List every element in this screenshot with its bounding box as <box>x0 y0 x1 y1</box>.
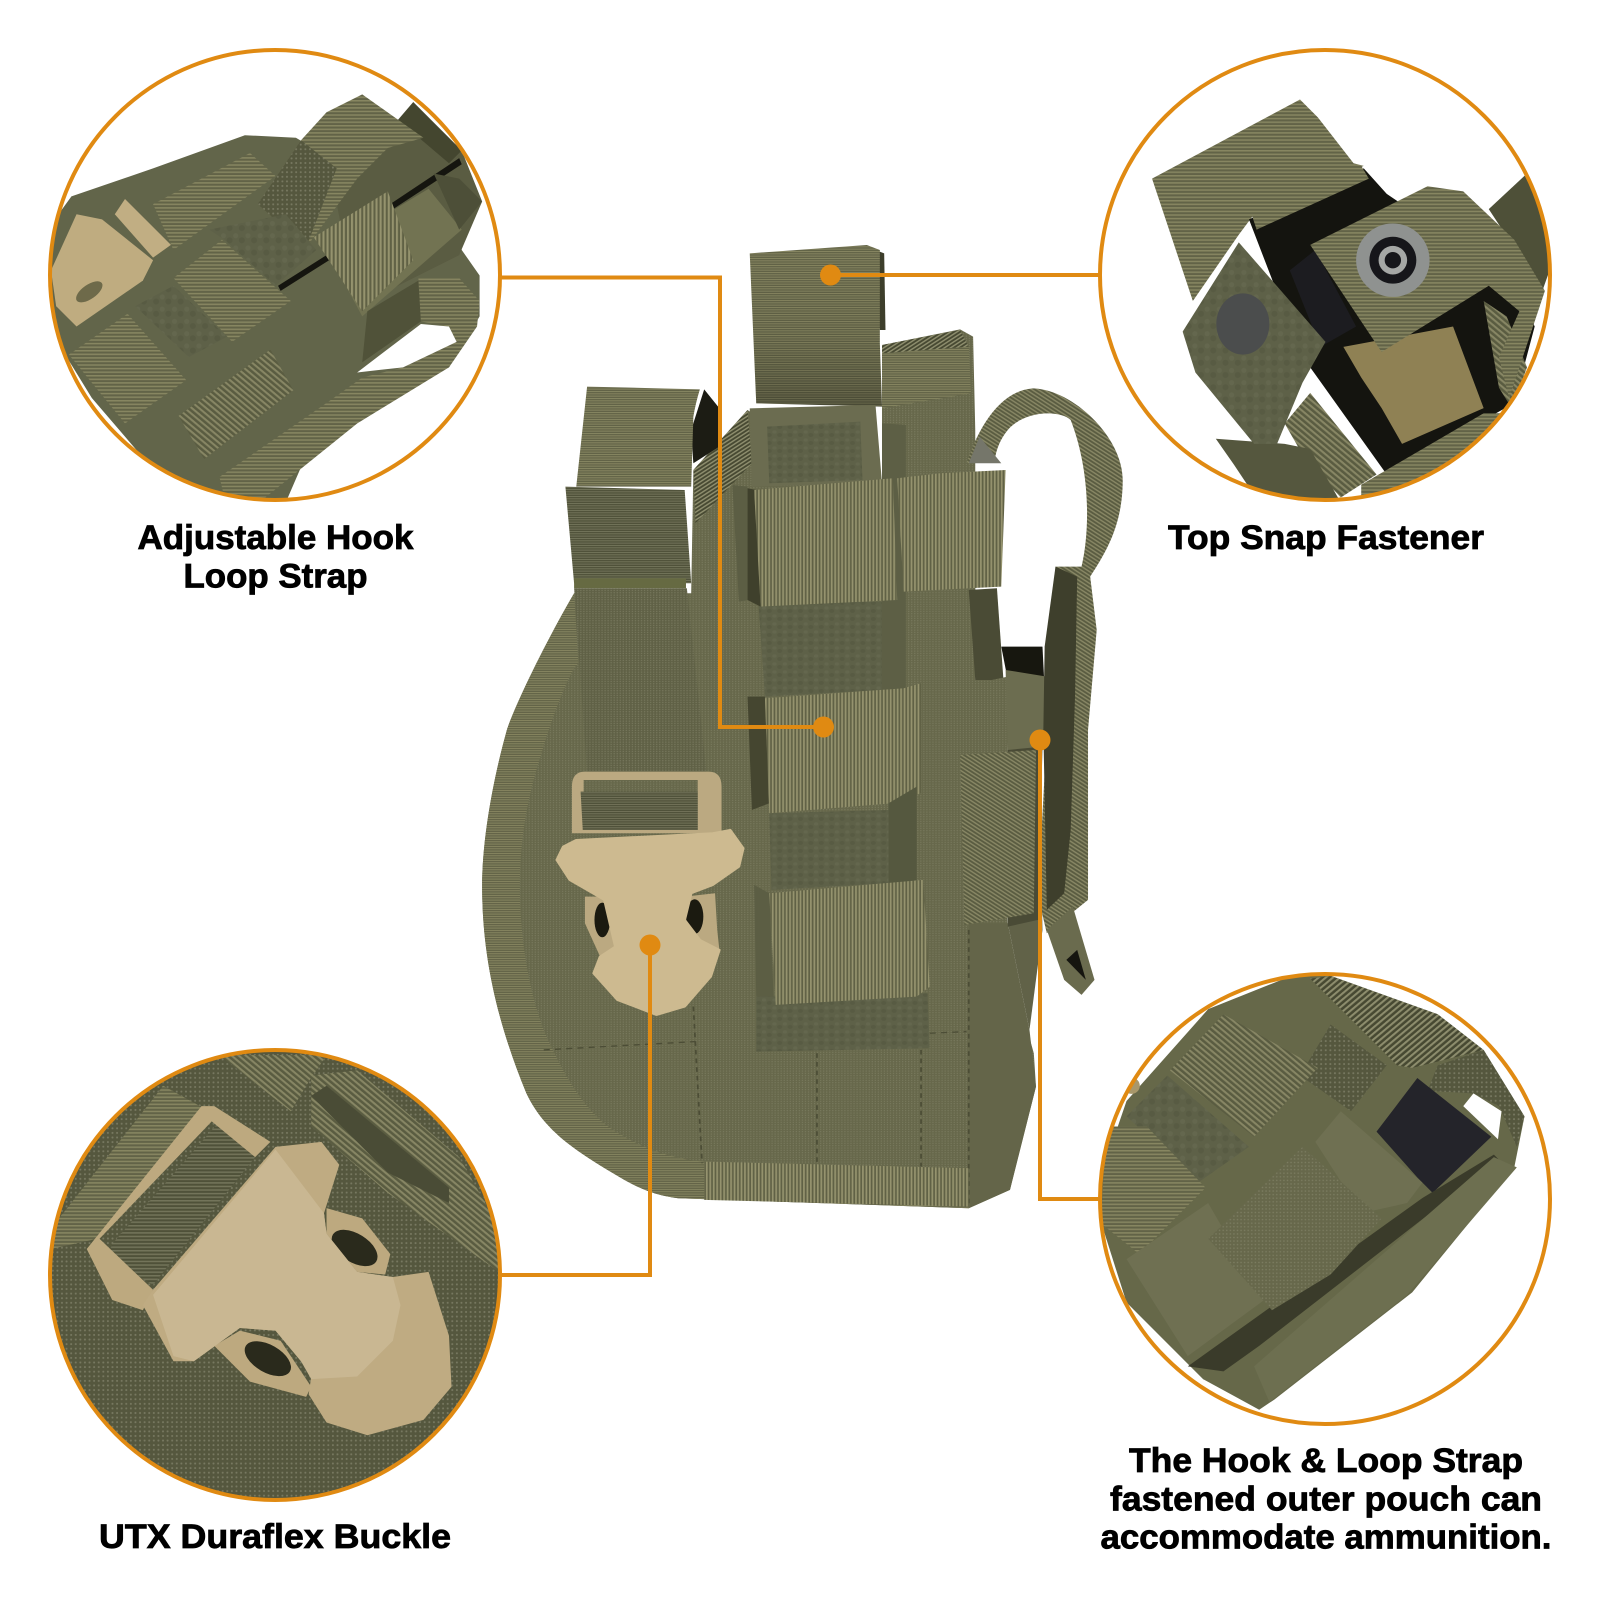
small pull loop <box>1047 907 1095 995</box>
left strap loop <box>576 387 719 487</box>
buckle <box>557 772 743 1015</box>
panel: detail circle outer pouch <box>1093 968 1550 1424</box>
buckle wing right <box>685 893 719 950</box>
buckle wings <box>585 897 617 957</box>
left strap keeper <box>565 487 691 583</box>
bottom ribbed band <box>704 1162 969 1207</box>
seams <box>544 930 969 1207</box>
ring <box>50 50 500 500</box>
label: hook and loop pouch: The Hook & Loop Strap <box>1129 1442 1523 1480</box>
connector lines <box>500 275 1100 1275</box>
marker dots <box>640 264 1050 956</box>
panel: detail circle buckle <box>46 1045 505 1504</box>
flap strap loop <box>967 388 1123 933</box>
right side panel <box>969 923 1036 1208</box>
ribbed edge binding <box>482 593 969 1208</box>
label: hook and loop pouch: accommodate ammunition. <box>1100 1518 1552 1556</box>
velcro panel middle <box>758 602 882 697</box>
main holster product <box>482 245 1123 1208</box>
ring <box>1100 50 1550 500</box>
webbing band two <box>748 683 921 813</box>
right outer pouch parts <box>960 647 1047 1030</box>
webbing band one <box>732 470 1006 607</box>
panel: detail circle snap fastener <box>1100 50 1555 503</box>
label: top snap fastener: Top Snap Fastener <box>1168 519 1484 557</box>
outer pouch flap <box>960 750 1036 925</box>
left strap lower <box>574 588 706 773</box>
label: hook and loop pouch <box>1100 1442 1552 1556</box>
buckle frame <box>572 772 722 833</box>
angled rim <box>693 410 752 523</box>
label: adjustable hook loop strap: Loop Strap <box>184 558 368 596</box>
holster top rim and back body <box>882 329 975 690</box>
webbing band three <box>754 880 930 1005</box>
stitching line <box>574 578 686 588</box>
velcro bottom panel <box>756 993 930 1052</box>
buckle holes <box>594 899 703 937</box>
label: adjustable hook loop strap <box>138 519 414 596</box>
velcro panel upper <box>750 405 882 487</box>
holster main body <box>482 410 1036 1208</box>
label: UTX duraflex buckle: UTX Duraflex Buckle <box>99 1518 451 1556</box>
panel: detail circle adjustable strap <box>50 50 500 503</box>
velcro lower <box>769 787 917 890</box>
column behind straps <box>882 423 906 697</box>
label: adjustable hook loop strap: Adjustable Hook <box>138 519 414 557</box>
right column dark gap <box>969 588 1003 680</box>
label: hook and loop pouch: fastened outer pouch can <box>1110 1480 1542 1518</box>
buckle body <box>557 830 743 1015</box>
strap through frame <box>581 792 698 830</box>
ring <box>50 1050 500 1500</box>
ring <box>1100 974 1550 1424</box>
top centre strap <box>750 245 885 407</box>
